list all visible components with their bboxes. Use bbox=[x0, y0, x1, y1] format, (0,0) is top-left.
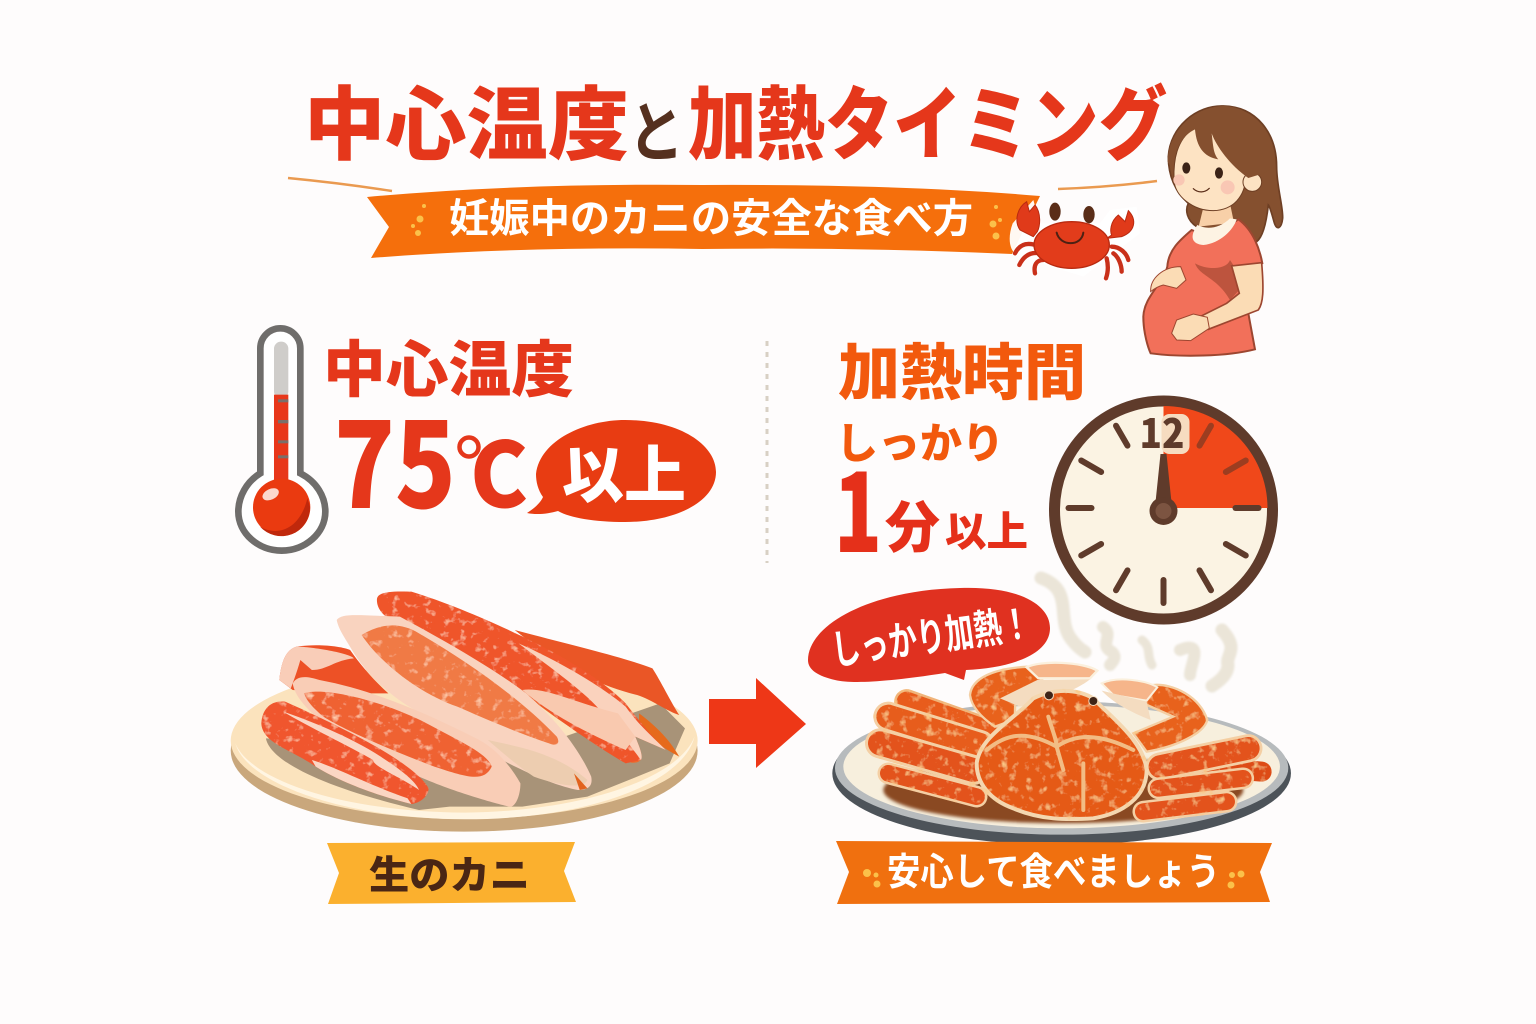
claws bbox=[970, 663, 1207, 752]
icon: clock bbox=[1054, 401, 1272, 619]
text: 1分以上: 1 bbox=[834, 428, 882, 584]
raw crab legs on plate bbox=[231, 591, 698, 832]
cooked crab on plate bbox=[832, 663, 1291, 845]
text: 1分以上 bbox=[834, 428, 1028, 584]
callout: しっかり加熱！: しっかり加熱！ bbox=[827, 590, 1034, 677]
title bbox=[304, 61, 1167, 177]
left legs bbox=[880, 702, 1262, 812]
crab leg: top bbox=[377, 591, 666, 763]
icon: crab bbox=[1010, 200, 1140, 278]
callout: 以上 bbox=[527, 420, 716, 522]
carapace bbox=[977, 691, 1147, 819]
temperature value: 75 bbox=[334, 371, 456, 542]
crab leg: front bbox=[261, 701, 429, 804]
crab leg: left back bbox=[279, 645, 388, 693]
crab leg: center bbox=[337, 615, 592, 790]
wooden plate bbox=[231, 662, 698, 832]
text: 1分以上: 以上 bbox=[945, 498, 1028, 558]
right legs bbox=[1200, 767, 1262, 772]
title: 中心温度 bbox=[304, 61, 629, 177]
metal plate bbox=[832, 701, 1291, 845]
label: raw crab: 生のカニ bbox=[369, 845, 530, 901]
divider bbox=[766, 341, 768, 563]
steam bbox=[1041, 578, 1231, 686]
callout: しっかり加熱！ bbox=[808, 588, 1050, 682]
heading: heating time: 加熱時間 bbox=[838, 323, 1086, 412]
title: と bbox=[628, 80, 684, 176]
crab leg: under shell bbox=[526, 695, 641, 763]
text: しっかり: しっかり bbox=[836, 410, 1004, 471]
callout: 以上: 以上 bbox=[562, 425, 686, 515]
heading: core temperature: 中心温度 bbox=[323, 320, 574, 409]
subtitle ribbon bbox=[288, 178, 1157, 258]
label: eat with confidence: 安心して食べましょう bbox=[887, 841, 1220, 896]
icon: pregnant woman bbox=[1143, 106, 1283, 356]
temperature value: C bbox=[470, 403, 528, 533]
subtitle ribbon: 妊娠中のカニの安全な食べ方 bbox=[449, 186, 973, 244]
title: 加熱タイミング bbox=[688, 61, 1167, 177]
eyes bbox=[1044, 690, 1098, 706]
label: raw crab bbox=[327, 842, 576, 904]
crab leg: back bbox=[515, 630, 679, 715]
arrow bbox=[709, 678, 806, 768]
icon: thermometer bbox=[238, 328, 325, 551]
text: 1分以上: 分 bbox=[885, 483, 940, 563]
icon: clock: 12 bbox=[1140, 402, 1184, 460]
crab leg: middle lower bbox=[293, 677, 520, 807]
